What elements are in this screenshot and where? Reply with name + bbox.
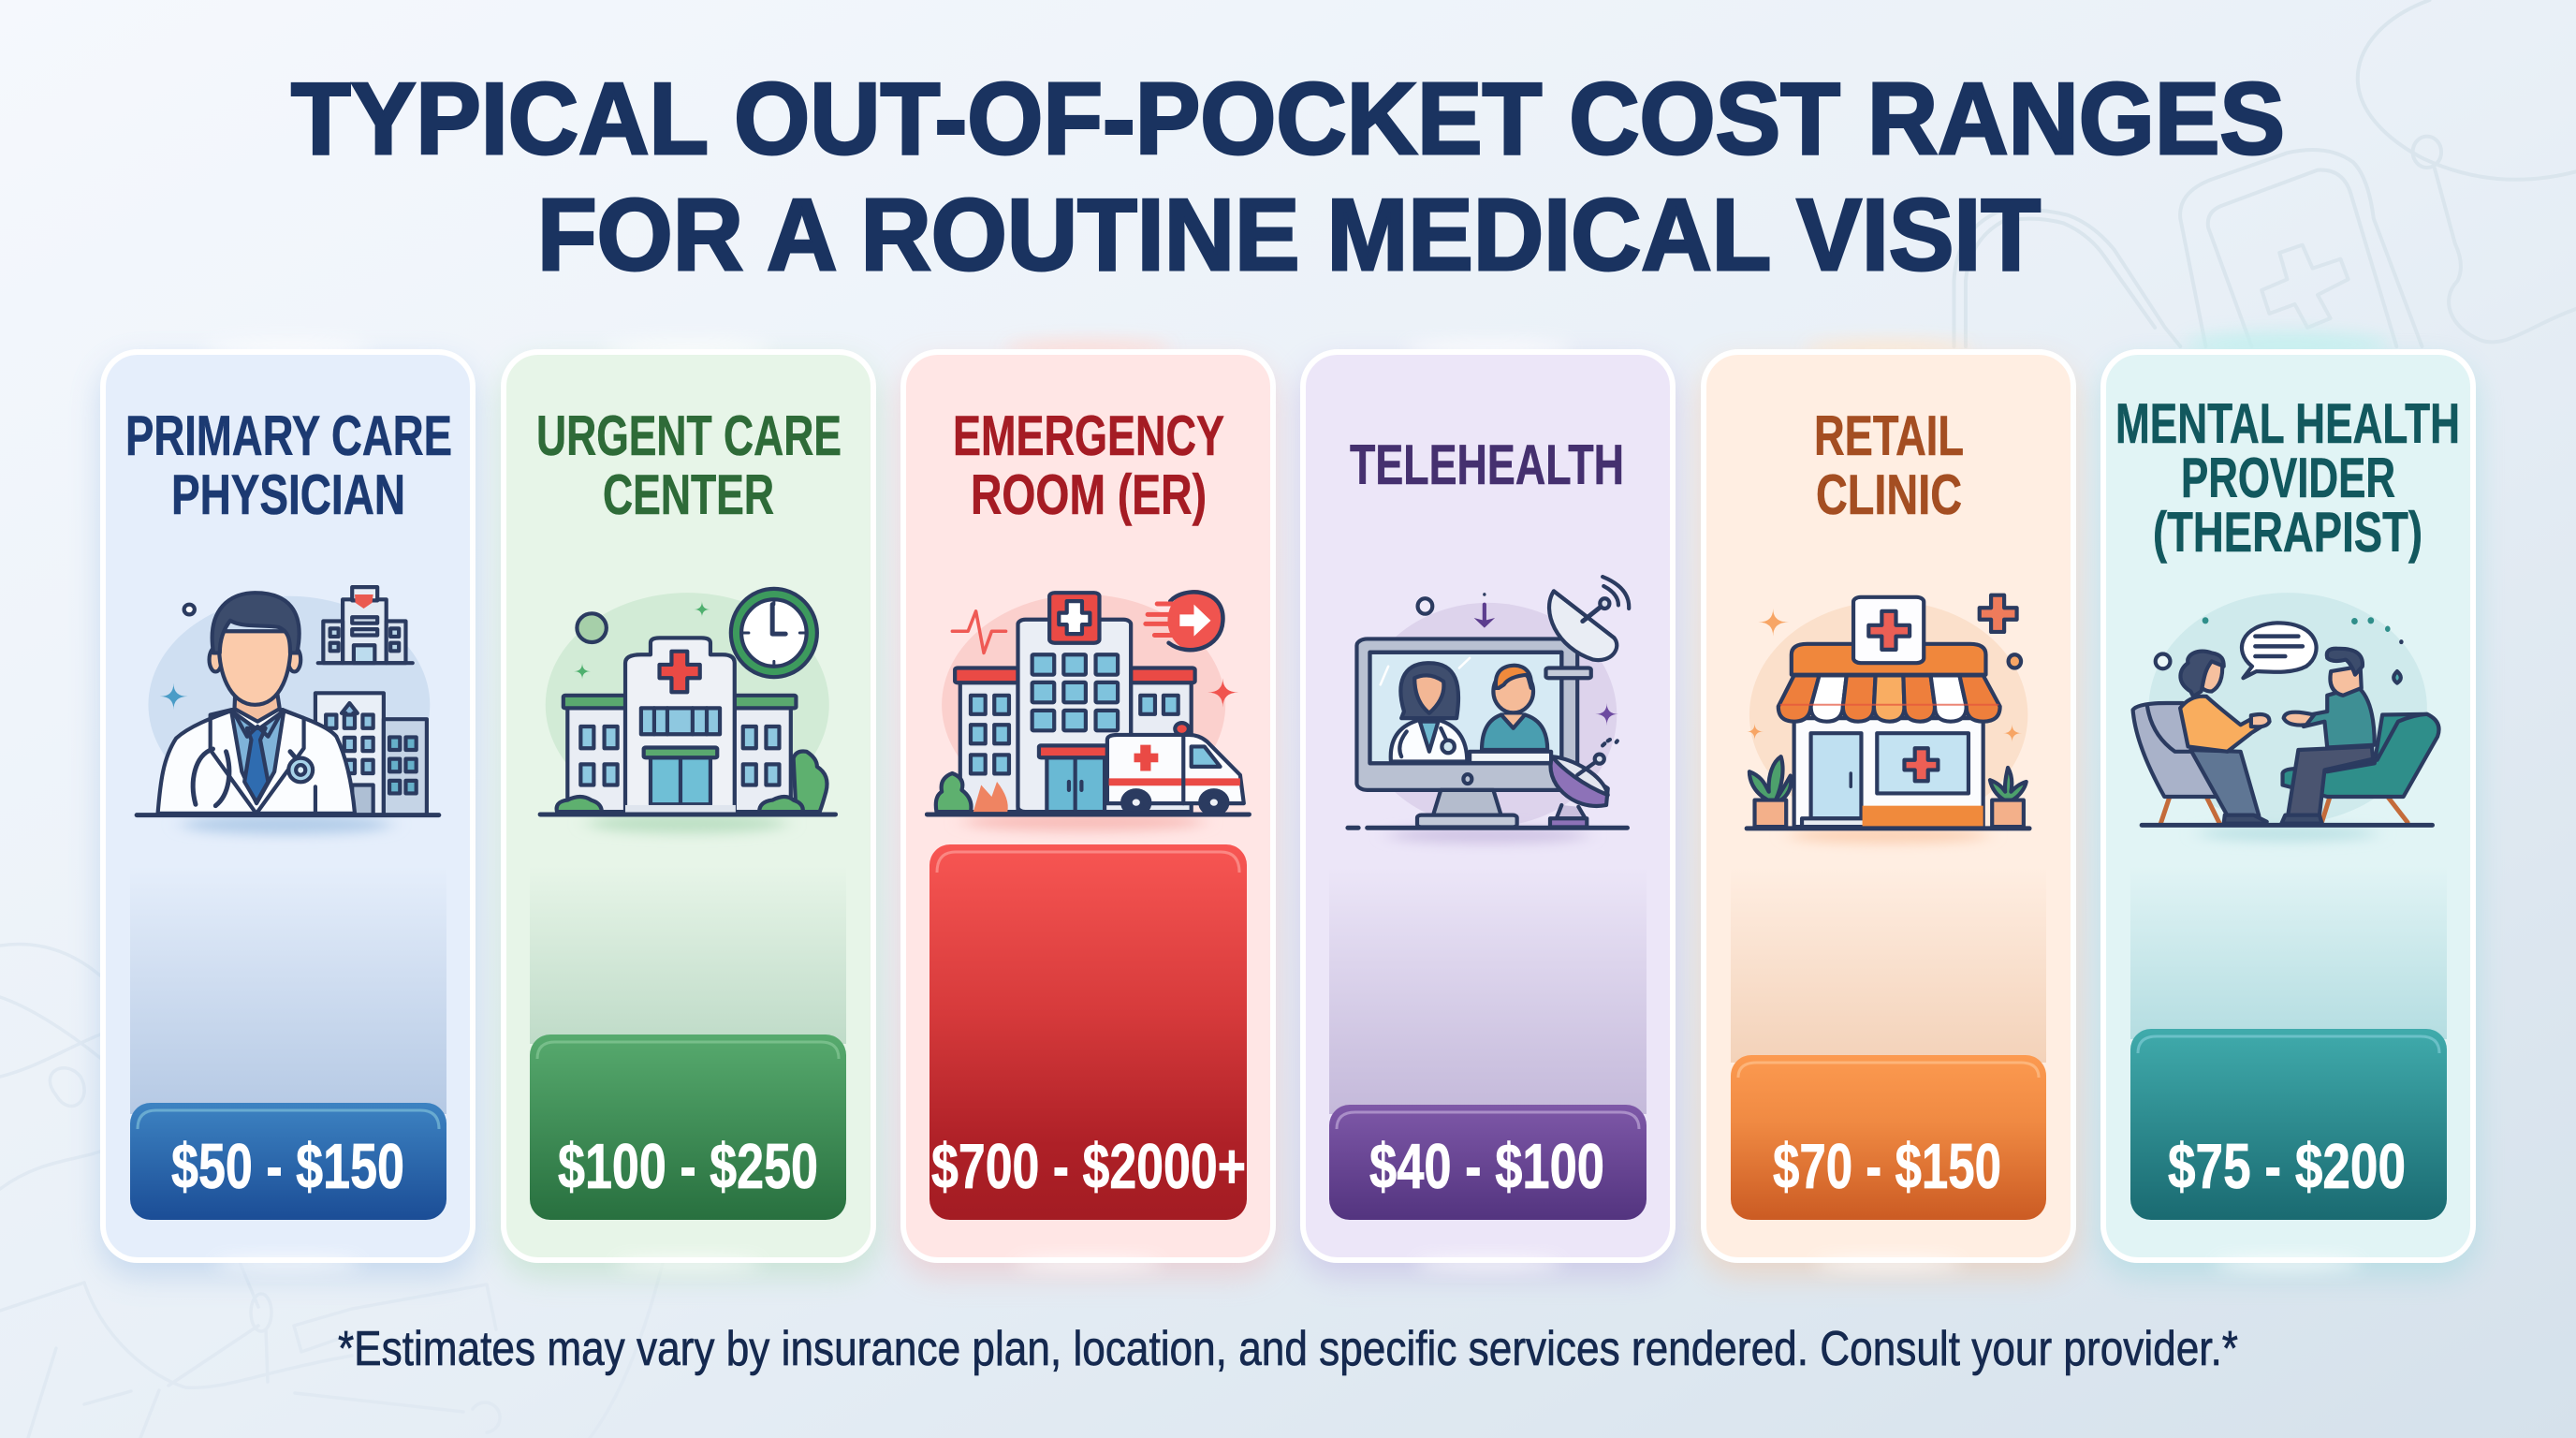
heading: mental health provider: MENTAL HEALTH [2115,392,2460,455]
heading: emergency room: EMERGENCY [953,404,1224,467]
panel: emergency room [900,340,1276,1276]
icon: therapist and client in chairs [2133,593,2439,842]
heading: urgent care center: URGENT CARE [536,404,842,467]
bar: $100 - $250 [530,1034,846,1220]
range track [1329,866,1647,1114]
title [291,62,2285,292]
panel: urgent care center [502,340,877,1276]
panel: telehealth [1300,340,1676,1276]
heading: urgent care center: CENTER [603,463,774,526]
footnote: *Estimates may vary by insurance plan, location, and specific services rendered. Consult your provider.* [338,1322,2238,1376]
bar: $70 - $150 [1731,1055,2046,1220]
icon: hospital with ambulance [927,590,1249,831]
title: FOR A ROUTINE MEDICAL VISIT [537,178,2041,292]
bar: $50 - $150 [130,1103,446,1220]
bar: $40 - $100: $40 - $100 [1369,1131,1604,1202]
bar: $75 - $200: $75 - $200 [2168,1131,2406,1202]
range track [1731,866,2046,1063]
bar: $75 - $200 [2130,1029,2447,1220]
range track [530,866,846,1044]
title: TYPICAL OUT-OF-POCKET COST RANGES [291,62,2285,176]
icon: telehealth monitor with satellite dishes [1348,577,1629,844]
heading: emergency room: ROOM (ER) [971,463,1207,526]
heading: primary care physician [125,404,452,526]
heading: retail clinic: RETAIL [1814,404,1964,467]
bar: $700 - $2000+: $700 - $2000+ [931,1131,1246,1202]
watermark: medical bag and stethoscope top right [1954,0,2576,346]
bar: $50 - $150: $50 - $150 [171,1131,404,1202]
bar: $700 - $2000+ [929,844,1247,1220]
bar: $70 - $150: $70 - $150 [1773,1131,2001,1202]
bar: $40 - $100 [1329,1105,1647,1220]
heading: telehealth: TELEHEALTH [1350,433,1624,496]
icon: urgent care building with clock [540,589,836,833]
heading: retail clinic: CLINIC [1816,463,1962,526]
panel: retail clinic [1701,340,2076,1276]
heading: urgent care center [536,404,842,526]
heading: mental health provider [2115,392,2460,564]
range track [130,866,446,1114]
heading: mental health provider: (THERAPIST) [2153,501,2422,564]
panel: mental health provider [2100,331,2476,1276]
icon: doctor with clinic buildings [137,587,439,834]
watermark: stethoscope and pill bottom left [0,944,663,1438]
heading: emergency room [953,404,1224,526]
bar: $100 - $250: $100 - $250 [558,1131,818,1202]
range track [2130,866,2447,1039]
heading: mental health provider: PROVIDER [2181,447,2395,509]
heading: primary care physician: PRIMARY CARE [125,404,452,467]
heading: retail clinic [1814,404,1964,526]
icon: retail clinic storefront [1747,595,2029,844]
panel: primary care physician [100,340,476,1276]
heading: primary care physician: PHYSICIAN [171,463,405,526]
